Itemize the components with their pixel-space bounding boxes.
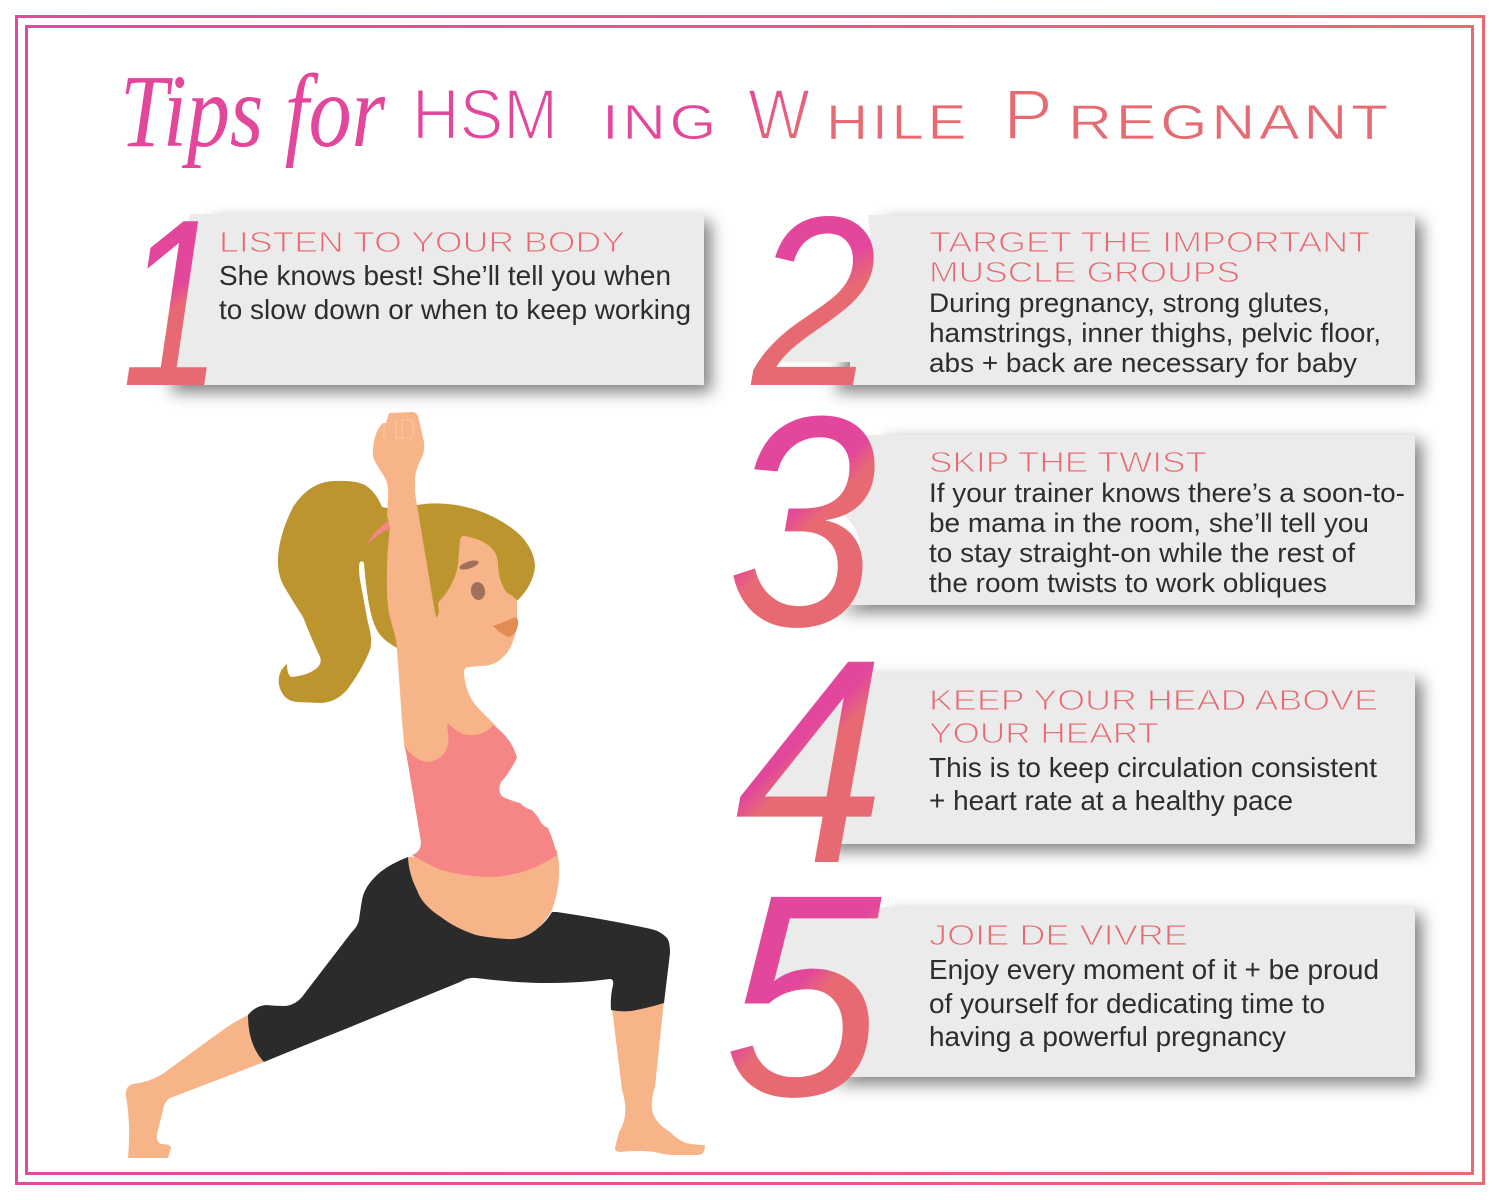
- heading 3: SKIP THE TWIST: [929, 447, 1207, 479]
- front leg: [612, 1000, 705, 1155]
- eyebrow: [458, 559, 480, 571]
- text block 1: She knows best! She’ll tell you when: [219, 260, 671, 291]
- title: HSM: [412, 76, 558, 155]
- text block 5: of yourself for dedicating time to: [929, 988, 1325, 1019]
- text block 5: having a powerful pregnancy: [929, 1021, 1286, 1052]
- title: Tips for: [120, 54, 385, 169]
- panel 3 background: [830, 435, 1415, 605]
- panel: tip 3: [727, 353, 1415, 689]
- title: [120, 54, 1392, 169]
- number 1: 1: [122, 171, 222, 436]
- leggings: [248, 857, 670, 1062]
- text block 2: During pregnancy, strong glutes,: [929, 288, 1330, 318]
- text block 5: Enjoy every moment of it + be proud: [929, 954, 1379, 985]
- number 4: 4: [735, 599, 885, 924]
- heading 4: YOUR HEART: [929, 718, 1159, 750]
- panel 1 background: [170, 214, 704, 385]
- heading 4: KEEP YOUR HEAD ABOVE: [929, 685, 1378, 717]
- heading 5: JOIE DE VIVRE: [929, 920, 1188, 952]
- tank top: [404, 722, 557, 877]
- title: REGNANT: [1068, 96, 1392, 150]
- fist detail: [384, 419, 413, 438]
- text block 4: + heart rate at a healthy pace: [929, 785, 1293, 816]
- hair tie: [366, 520, 391, 546]
- text block 4: [929, 752, 1377, 816]
- text block 5: [929, 954, 1379, 1052]
- belly: [408, 850, 559, 939]
- heading 2: MUSCLE GROUPS: [929, 257, 1240, 289]
- title: HILE: [826, 96, 970, 150]
- heading 2: [929, 227, 1370, 289]
- heading 4: [929, 685, 1378, 750]
- eye: [470, 581, 486, 601]
- heading 1: LISTEN TO YOUR BODY: [219, 227, 625, 259]
- text block 2: abs + back are necessary for baby: [929, 348, 1358, 378]
- panel 4 background: [765, 673, 1415, 844]
- title: W: [748, 76, 810, 155]
- title: P: [1003, 76, 1053, 155]
- number 2: 2: [750, 167, 877, 437]
- text block 3: If your trainer knows there’s a soon-to-: [929, 478, 1405, 508]
- panel 5 background: [772, 907, 1415, 1077]
- text block 3: [929, 478, 1405, 598]
- panel 2 background: [775, 215, 1415, 385]
- illustration: pregnant woman in lunge pose: [126, 412, 705, 1158]
- text block 2: hamstrings, inner thighs, pelvic floor,: [929, 318, 1381, 348]
- number 3: 3: [727, 353, 879, 689]
- panel: tip 4: [735, 599, 1415, 924]
- hair and ponytail: [278, 481, 535, 703]
- box shadows: [170, 221, 1422, 1084]
- text block 3: the room twists to work obliques: [929, 568, 1327, 598]
- raised arm, head and chest: [373, 412, 517, 762]
- back leg: [126, 1015, 264, 1158]
- text block 4: This is to keep circulation consistent: [929, 752, 1377, 783]
- panel: tip 1: [122, 171, 704, 436]
- text block 2: [929, 288, 1381, 378]
- lips: [493, 617, 518, 637]
- text block 1: [219, 260, 691, 325]
- panel: tip 2: [750, 167, 1415, 437]
- heading 2: TARGET THE IMPORTANT: [929, 227, 1370, 259]
- title: ING: [602, 96, 720, 150]
- text block 3: to stay straight-on while the rest of: [929, 538, 1356, 568]
- number 5: 5: [724, 835, 883, 1157]
- text block 3: be mama in the room, she’ll tell you: [929, 508, 1369, 538]
- text block 1: to slow down or when to keep working: [219, 294, 691, 325]
- panel: tip 5: [724, 835, 1415, 1157]
